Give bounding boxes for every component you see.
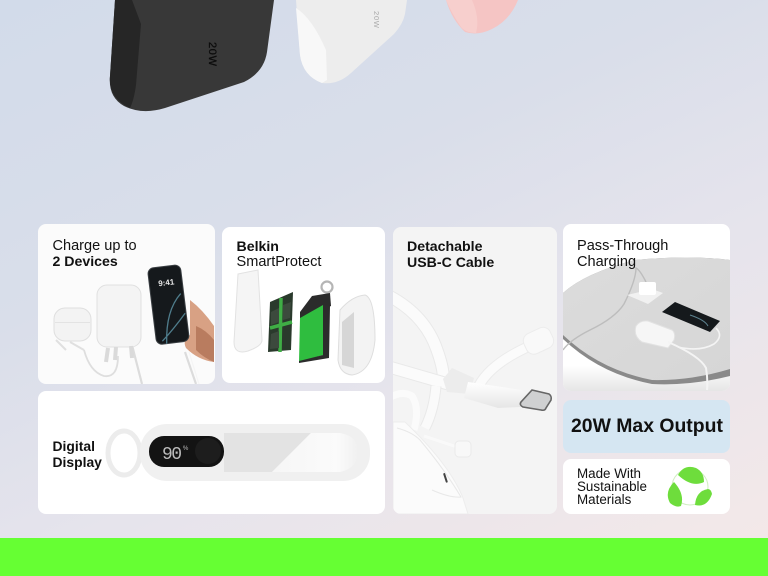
illustration: exploded power bank view — [234, 270, 376, 376]
heading: pass-through charging: Pass-Through — [577, 238, 668, 254]
heading: digital display — [52, 438, 102, 470]
heading: detachable USB-C cable: Detachable — [407, 238, 482, 254]
heading: made with sustainable materials: Materials — [577, 492, 631, 507]
heading: made with sustainable materials: Sustainable — [577, 479, 647, 494]
illustration: cable and power bank — [393, 291, 552, 498]
heading: charge up to 2 devices: Charge up to — [52, 238, 137, 254]
panel: made with sustainable materials — [563, 459, 730, 514]
black power bank: 20W — [206, 42, 218, 67]
heading: 20W max output: 20W Max Output — [571, 415, 723, 437]
illustration: power bank, earbuds case, phone and hand — [54, 264, 214, 384]
heading: Belkin SmartProtect — [236, 238, 322, 270]
heading: charge up to 2 devices — [52, 238, 137, 269]
panel: 20W max output — [563, 400, 730, 453]
phone — [662, 302, 720, 332]
LED display — [149, 436, 224, 467]
LED display: 90 — [162, 445, 182, 465]
heading: charge up to 2 devices: 2 Devices — [52, 253, 118, 269]
panel: digital display — [38, 391, 385, 514]
icon: recycling leaves — [668, 466, 712, 507]
illustration: power bank, earbuds case, phone and hand: 9:41 — [158, 277, 175, 288]
heading: made with sustainable materials: Made With — [577, 466, 641, 481]
heading: pass-through charging: Charging — [577, 254, 636, 270]
white power bank — [296, 0, 407, 83]
heading: detachable USB-C cable — [407, 238, 494, 270]
heading: detachable USB-C cable: USB-C Cable — [407, 254, 494, 270]
heading: digital display: Display — [52, 454, 102, 470]
black power bank — [110, 0, 274, 111]
pink power bank — [446, 0, 518, 33]
top product illustration: three power banks — [110, 0, 518, 112]
heading: digital display: Digital — [52, 438, 95, 454]
illustration: table with charger, power bank and phone — [563, 258, 730, 391]
LED display: % — [183, 446, 189, 452]
panel: Belkin SmartProtect — [222, 227, 385, 383]
heading: pass-through charging — [577, 238, 668, 270]
heading: Belkin SmartProtect: Belkin — [236, 238, 279, 254]
panel: pass-through charging — [563, 224, 730, 391]
heading: Belkin SmartProtect: SmartProtect — [236, 254, 321, 270]
illustration: power bank side with LED display — [106, 424, 370, 481]
panel: charge up to 2 devices — [38, 224, 214, 384]
USB-C connector — [520, 390, 551, 410]
white power bank: 20W — [372, 11, 381, 29]
green footer band — [0, 538, 768, 576]
heading: made with sustainable materials — [577, 466, 647, 507]
panel: detachable USB-C cable — [393, 227, 557, 514]
